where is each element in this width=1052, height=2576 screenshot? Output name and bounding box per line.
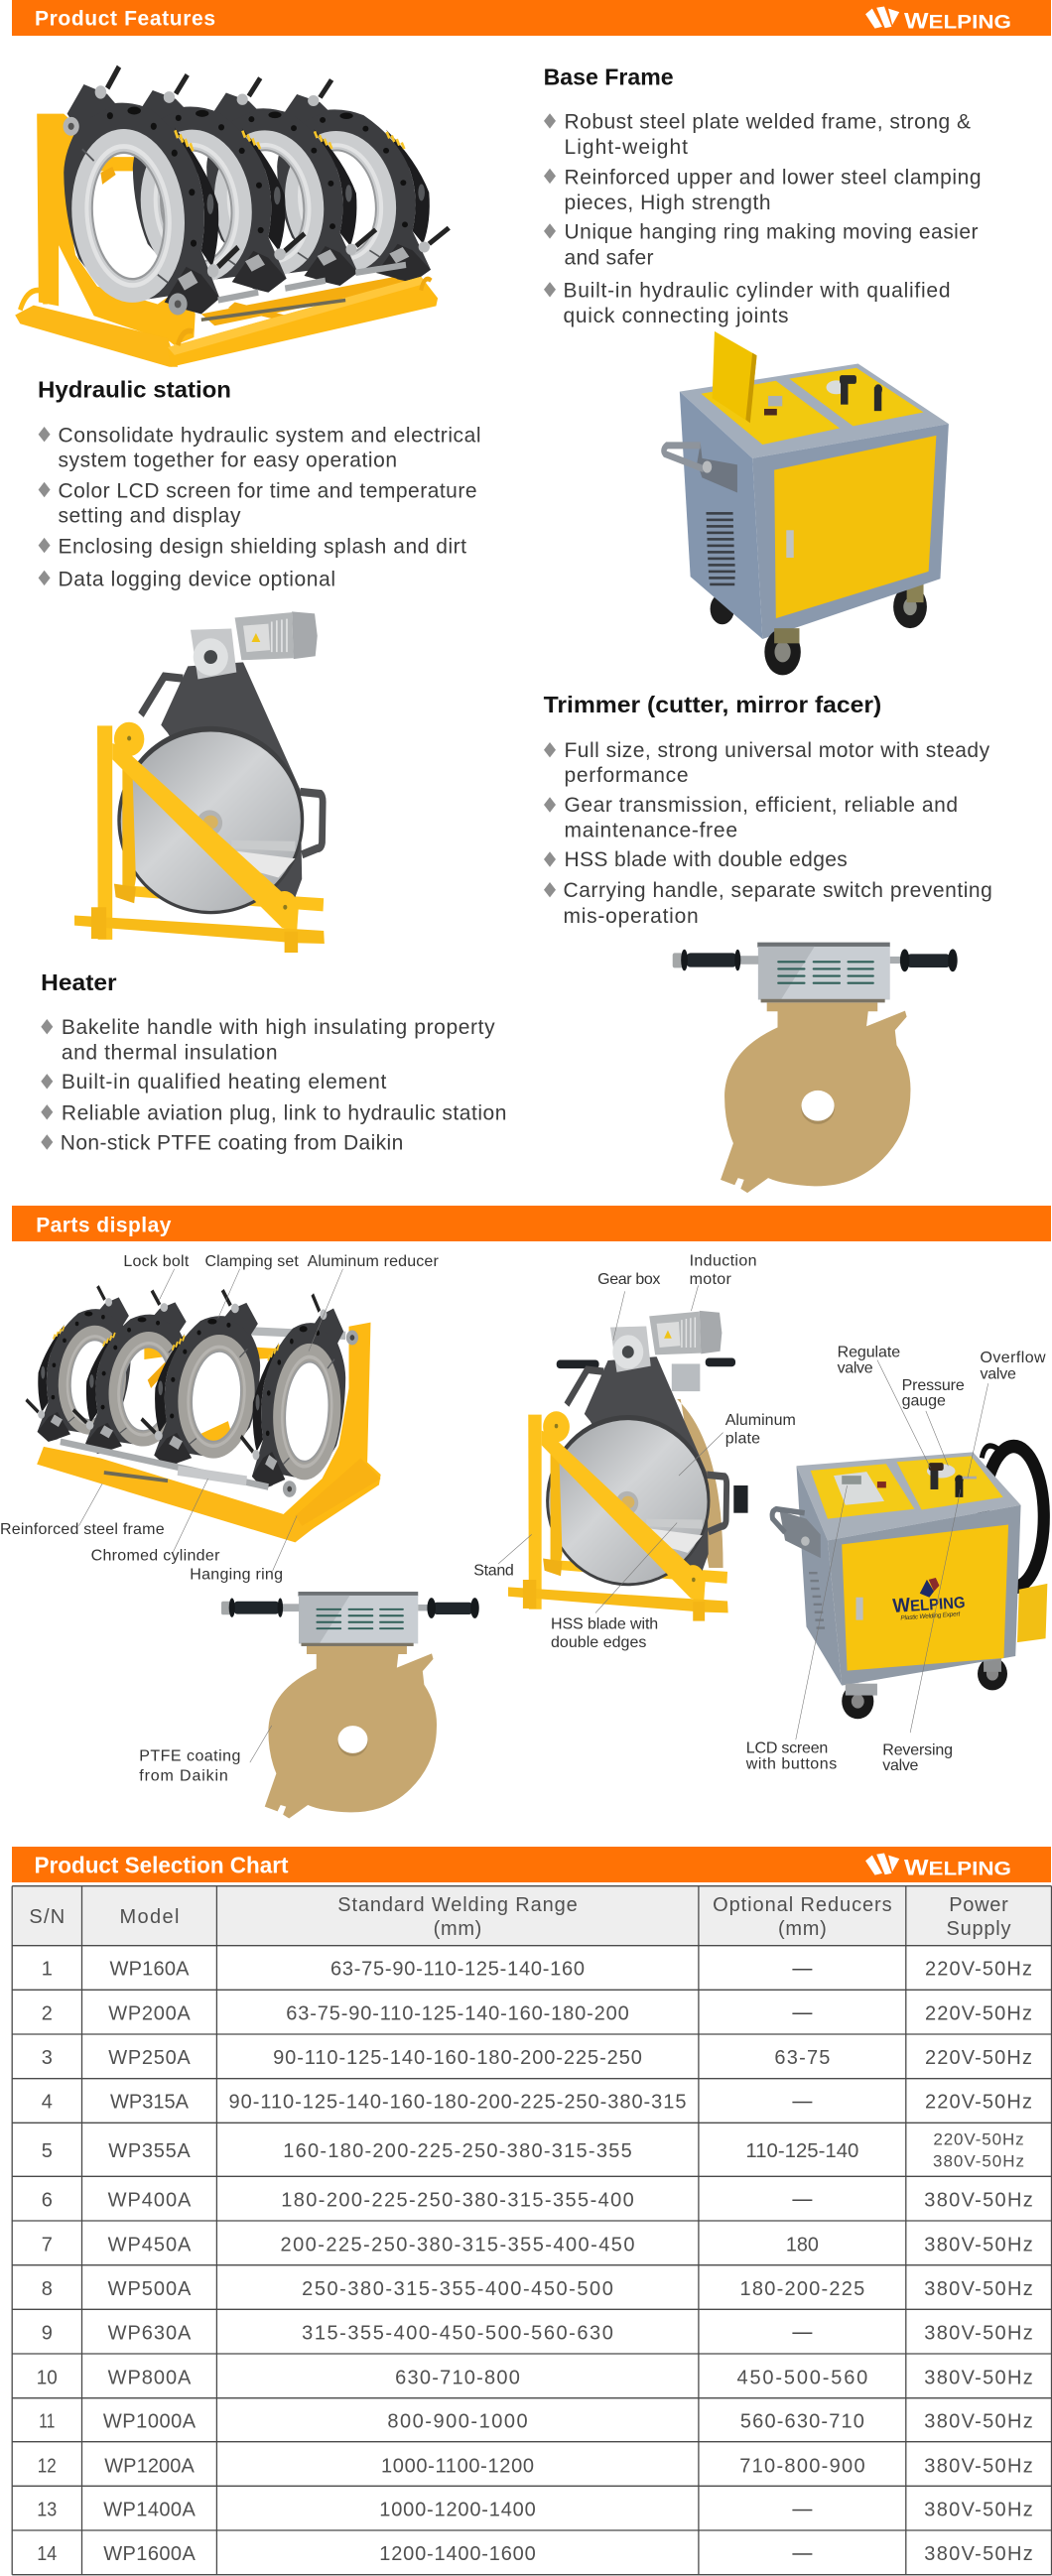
logo on cabinet door: Plastic Welding Expert <box>900 1610 962 1621</box>
bullet 2: Reinforced upper and lower steel clamping <box>564 167 981 190</box>
row 10 <box>37 2367 1033 2388</box>
row 6: 6 <box>42 2189 53 2211</box>
row 14: 380V-50Hz <box>924 2543 1033 2565</box>
label: Gear box <box>597 1271 660 1288</box>
row 4: 220V-50Hz <box>925 2092 1032 2114</box>
label: valve <box>882 1757 918 1774</box>
label <box>745 1740 837 1772</box>
panel: Heater <box>41 969 506 1154</box>
row 1: WP160A <box>109 1959 190 1981</box>
row 1 <box>42 1959 1032 1981</box>
row 10: 10 <box>37 2367 58 2388</box>
bullet 2: Gear transmission, efficient, reliable and <box>564 794 958 817</box>
header bar: Product Features <box>12 0 1051 36</box>
label <box>882 1741 953 1774</box>
label: valve <box>981 1365 1016 1383</box>
heading: Trimmer (cutter, mirror facer) <box>544 692 881 717</box>
bullet 2: pieces, High strength <box>564 192 770 214</box>
label: gauge <box>902 1393 946 1410</box>
row 4 <box>42 2092 1032 2114</box>
heading: Heater <box>41 969 117 995</box>
bullet 1 <box>544 739 990 787</box>
row 14: 1200-1400-1600 <box>379 2543 536 2565</box>
bullet 2: maintenance-free <box>564 820 737 842</box>
label: Aluminum reducer <box>308 1253 439 1270</box>
bullet 1: Consolidate hydraulic system and electrical <box>58 425 480 448</box>
label: Lock bolt <box>123 1253 190 1270</box>
row 11: WP1000A <box>103 2411 197 2433</box>
row 13: WP1400A <box>103 2500 196 2521</box>
label: Reinforced steel frame <box>0 1521 165 1538</box>
row 13 <box>37 2500 1033 2521</box>
row 6 <box>42 2189 1033 2211</box>
bullet 2: Built-in qualified heating element <box>62 1071 387 1094</box>
header bar: Product Selection Chart <box>12 1847 1051 1882</box>
row 4: WP315A <box>110 2092 190 2114</box>
row 3: 90-110-125-140-160-180-200-225-250 <box>273 2047 642 2069</box>
row 11: 560-630-710 <box>740 2411 864 2433</box>
row 7: 7 <box>42 2234 53 2255</box>
label: HSS blade with <box>551 1615 658 1632</box>
row 8: 8 <box>42 2278 53 2300</box>
leader lines <box>78 1269 988 1762</box>
row 14 <box>37 2543 1033 2565</box>
bullet 4: Non-stick PTFE coating from Daikin <box>61 1131 403 1154</box>
row 1: 220V-50Hz <box>925 1959 1032 1981</box>
bullet 1: Robust steel plate welded frame, strong & <box>564 111 971 134</box>
bullet 4: mis-operation <box>564 905 699 928</box>
row 12: WP1200A <box>104 2455 195 2477</box>
photo: trimmer behind heater <box>557 1358 748 1568</box>
row 5: 160-180-200-225-250-380-315-355 <box>283 2140 632 2162</box>
row 9 <box>42 2322 1033 2344</box>
bullet 1: Bakelite handle with high insulating property <box>62 1016 495 1039</box>
table header row: Supply <box>947 1918 1010 1940</box>
row 7: 200-225-250-380-315-355-400-450 <box>280 2234 635 2255</box>
bullet 3: Unique hanging ring making moving easier <box>564 221 979 244</box>
panel: Base Frame <box>544 64 981 327</box>
row 14: 14 <box>37 2543 57 2565</box>
row 5: 5 <box>42 2140 53 2162</box>
row 3 <box>42 2047 1032 2069</box>
table header row: (mm) <box>778 1918 827 1940</box>
row 7 <box>42 2234 1033 2255</box>
label: from Daikin <box>139 1767 228 1784</box>
row 2: WP200A <box>108 2002 191 2024</box>
table header row: Model <box>119 1906 179 1928</box>
row 8: 380V-50Hz <box>924 2278 1033 2300</box>
bullet 3: HSS blade with double edges <box>564 848 848 871</box>
panel: Trimmer <box>544 692 992 928</box>
bullet 4: Data logging device optional <box>58 568 335 590</box>
bullet 2: Color LCD screen for time and temperature <box>58 479 476 502</box>
bullet 2 <box>39 479 476 528</box>
bullet 4 <box>544 280 951 327</box>
photo: heater plate <box>221 1592 479 1819</box>
row 10: 450-500-560 <box>736 2367 867 2388</box>
bullet 3: Enclosing design shielding splash and dirt <box>58 536 466 558</box>
row 8: 180-200-225 <box>740 2278 864 2300</box>
label: PTFE coating <box>139 1748 240 1764</box>
row 7: 180 <box>786 2234 819 2255</box>
bullet 4 <box>544 879 992 928</box>
label: Overflow <box>981 1350 1046 1366</box>
bullet 1 <box>41 1016 495 1064</box>
row 9: 9 <box>42 2322 53 2344</box>
row 13: 1000-1200-1400 <box>379 2500 536 2521</box>
label: Clamping set <box>204 1253 299 1270</box>
bullet 1: Light-weight <box>564 136 688 159</box>
header title: Product Selection Chart: Product Selection Chart <box>34 1852 289 1877</box>
row 12: 380V-50Hz <box>924 2455 1033 2477</box>
photo: hydraulic station with hose reel <box>772 1446 1047 1719</box>
row 9: 315-355-400-450-500-560-630 <box>302 2322 613 2344</box>
label: plate <box>725 1431 760 1448</box>
label <box>902 1377 965 1410</box>
photo: hydraulic station cabinet <box>664 331 949 675</box>
bullet 3: and safer <box>564 246 653 269</box>
bullet 3 <box>544 221 979 269</box>
row 5: 110-125-140 <box>745 2140 858 2162</box>
row 3: 63-75 <box>774 2047 830 2069</box>
row 13: 13 <box>37 2500 57 2521</box>
row 10: WP800A <box>108 2367 192 2388</box>
row 9: 380V-50Hz <box>924 2322 1033 2344</box>
bullet 3: Reliable aviation plug, link to hydraulic station <box>62 1102 506 1125</box>
row 12: 1000-1100-1200 <box>381 2455 534 2477</box>
bullet 1 <box>39 425 480 472</box>
label <box>690 1253 756 1288</box>
label <box>838 1345 900 1377</box>
photo: trimmer with handles <box>673 943 958 1193</box>
label <box>725 1412 796 1448</box>
row 9: WP630A <box>108 2322 192 2344</box>
row 10: 380V-50Hz <box>924 2367 1033 2388</box>
label <box>981 1350 1046 1383</box>
bullet 2 <box>544 794 958 842</box>
row 7: 380V-50Hz <box>924 2234 1033 2255</box>
row 11 <box>39 2411 1033 2433</box>
row 7: WP450A <box>108 2234 192 2255</box>
label: with buttons <box>745 1756 837 1772</box>
logo on cabinet door: WELPING <box>892 1591 966 1617</box>
row 3: 220V-50Hz <box>925 2047 1032 2069</box>
photo: welding machine with labelled parts <box>26 1286 381 1542</box>
bullet 1: and thermal insulation <box>62 1041 278 1064</box>
row 1: 1 <box>42 1959 53 1981</box>
row 6: 180-200-225-250-380-315-355-400 <box>281 2189 634 2211</box>
table: product selection chart <box>12 1886 1052 2575</box>
table header row: S/N <box>29 1906 65 1928</box>
label: double edges <box>551 1634 646 1651</box>
bullet 1 <box>544 111 971 159</box>
row 6: WP400A <box>108 2189 192 2211</box>
bullet 1: system together for easy operation <box>58 449 397 472</box>
bullet 4: Carrying handle, separate switch preventing <box>564 879 992 902</box>
logo: Welping <box>865 7 1011 33</box>
row 13: 380V-50Hz <box>924 2500 1033 2521</box>
label: LCD screen <box>746 1740 828 1757</box>
row 11: 800-900-1000 <box>387 2411 528 2433</box>
row 8: WP500A <box>108 2278 192 2300</box>
row 2 <box>42 2002 1032 2024</box>
row 1: 63-75-90-110-125-140-160 <box>330 1959 585 1981</box>
panel: Hydraulic station <box>38 377 480 590</box>
header bar: Parts display <box>12 1206 1051 1241</box>
row 6: 380V-50Hz <box>924 2189 1033 2211</box>
row 10: 630-710-800 <box>395 2367 520 2388</box>
bullet 2: setting and display <box>58 505 241 528</box>
row 8: 250-380-315-355-400-450-500 <box>302 2278 613 2300</box>
row 4: 4 <box>42 2092 53 2114</box>
bullet 1: Full size, strong universal motor with steady <box>564 739 990 762</box>
row 5: 380V-50Hz <box>933 2151 1024 2170</box>
row 12: 12 <box>38 2455 57 2477</box>
bullet 4: Built-in hydraulic cylinder with qualified <box>564 280 951 303</box>
bullet 2 <box>544 167 981 214</box>
label: Pressure <box>902 1377 965 1394</box>
heading: Hydraulic station <box>38 377 231 403</box>
header title: Product Features: Product Features <box>35 8 215 30</box>
label: valve <box>838 1359 873 1377</box>
label: Reversing <box>882 1741 953 1758</box>
bullet 4: quick connecting joints <box>564 305 788 327</box>
logo: Welping: WELPING <box>904 1856 1011 1879</box>
row 8 <box>42 2278 1033 2300</box>
row 12: 710-800-900 <box>739 2455 865 2477</box>
table header row: Standard Welding Range <box>337 1894 578 1916</box>
photo: heater on stand <box>508 1311 728 1621</box>
label <box>139 1748 240 1784</box>
label <box>551 1615 658 1651</box>
label: Induction <box>690 1253 756 1270</box>
row 5 <box>42 2130 1024 2170</box>
row 5: 220V-50Hz <box>933 2130 1024 2149</box>
table header row: (mm) <box>434 1918 481 1940</box>
label: Regulate <box>838 1345 900 1361</box>
row 3: 3 <box>42 2047 53 2069</box>
header title: Parts display: Parts display <box>36 1215 172 1236</box>
table header row: Power <box>949 1894 1008 1916</box>
heading: Base Frame <box>544 64 674 89</box>
row 2: 2 <box>42 2002 53 2024</box>
row 2: 63-75-90-110-125-140-160-180-200 <box>286 2002 629 2024</box>
row 14: WP1600A <box>103 2543 196 2565</box>
row 5: WP355A <box>108 2140 191 2162</box>
row 12 <box>38 2455 1033 2477</box>
row 3: WP250A <box>108 2047 191 2069</box>
label: Hanging ring <box>190 1567 283 1584</box>
labels: parts callouts <box>0 1253 1046 1784</box>
row 11: 11 <box>39 2411 55 2433</box>
logo: Welping <box>865 1854 1011 1879</box>
table header row: Optional Reducers <box>713 1894 892 1916</box>
photo: heater / mirror plate <box>74 611 325 953</box>
table header row <box>29 1894 1010 1940</box>
row 2: 220V-50Hz <box>925 2002 1032 2024</box>
logo: Welping: WELPING <box>904 8 1011 34</box>
bullet 1: performance <box>564 764 689 787</box>
photo: butt welding machine with four clamps <box>15 66 449 367</box>
row 4: 90-110-125-140-160-180-200-225-250-380-315 <box>228 2092 687 2114</box>
label: motor <box>690 1271 731 1288</box>
label: Chromed cylinder <box>91 1548 220 1565</box>
label: Stand <box>473 1563 514 1580</box>
row 11: 380V-50Hz <box>924 2411 1033 2433</box>
label: Aluminum <box>725 1412 796 1429</box>
